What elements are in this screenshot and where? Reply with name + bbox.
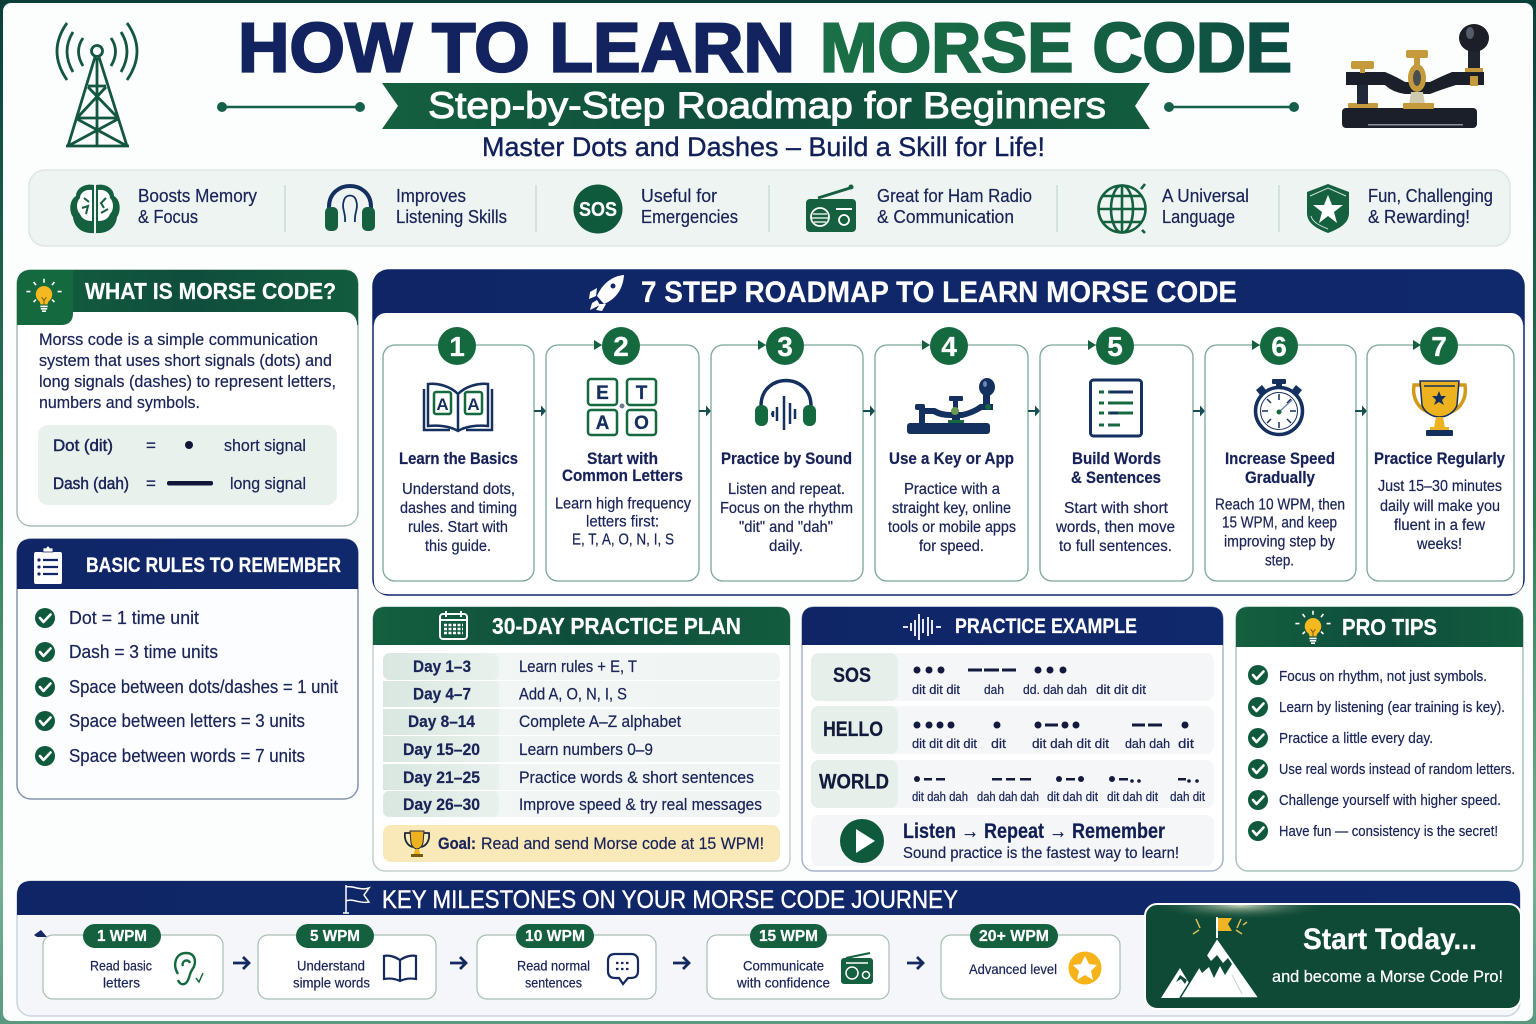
goal callout: Goal: [438, 834, 476, 853]
rule list: Space between words = 7 units [69, 746, 305, 766]
benefit: ham radio [806, 184, 1032, 232]
step 2 [546, 327, 699, 581]
example: SOS: dd. dah dah [1023, 683, 1087, 697]
row: day 8-14: Complete A–Z alphabet [519, 712, 681, 731]
step text: to full sentences. [1059, 538, 1172, 555]
benefit: rewarding [1307, 184, 1493, 233]
icon: ear [175, 953, 203, 984]
benefit: memory [70, 185, 257, 233]
title: MORSE CODE [820, 8, 1292, 86]
goal callout: Read and send Morse code at 15 WPM! [481, 834, 764, 853]
icon: morse key [907, 378, 995, 434]
number badge: 6 [1271, 331, 1287, 362]
number badge [438, 327, 476, 365]
description [39, 330, 336, 412]
icon: gold star [1068, 952, 1102, 984]
rule list: Space between letters = 3 units [69, 711, 305, 731]
step text: Understand dots, [402, 481, 515, 498]
step text: words, then move [1055, 519, 1175, 536]
row: day 15-20: Learn numbers 0–9 [519, 740, 653, 759]
step title [562, 450, 683, 485]
panel: start today call to action [1145, 904, 1521, 1009]
step text [1215, 496, 1345, 570]
icon: globe [1098, 184, 1146, 233]
benefit: memory: Boosts Memory [138, 186, 257, 206]
icon: play button [840, 819, 884, 863]
icon: radio tower [57, 23, 137, 146]
benefit: ham radio: & Communication [877, 207, 1014, 227]
heading: KEY MILESTONES ON YOUR MORSE CODE JOURNEY [382, 886, 958, 914]
dot and dash legend: = [146, 474, 156, 493]
row: day 1-3: Learn rules + E, T [519, 657, 637, 676]
example: HELLO: dah dah [1125, 737, 1170, 751]
step title: Increase Speed [1225, 450, 1335, 468]
heading: PRO TIPS [1342, 614, 1437, 640]
milestone: 1 WPM: Read basic [90, 958, 152, 974]
dot and dash legend [38, 425, 337, 505]
icon: stopwatch [1256, 379, 1302, 434]
arrow [907, 957, 923, 969]
header [57, 8, 1489, 162]
dot and dash legend: = [146, 436, 156, 455]
row: day 8-14: Day 8–14 [408, 712, 475, 731]
example: SOS: SOS [833, 664, 871, 687]
step text: daily. [769, 538, 803, 555]
schedule table [383, 653, 780, 817]
example: WORLD [811, 760, 1214, 808]
example: HELLO [811, 706, 1214, 754]
step 1 [383, 327, 534, 581]
step 3 [711, 327, 863, 581]
row: day 1-3 [383, 653, 780, 680]
number badge [602, 327, 640, 365]
heading: 30-DAY PRACTICE PLAN [492, 613, 741, 639]
icon: gold trophy [405, 831, 429, 857]
panel: key milestones [17, 881, 1520, 1016]
step text: Start with short [1064, 500, 1169, 517]
arrow [1028, 406, 1040, 416]
icon: light bulb [17, 270, 73, 325]
heading: PRACTICE EXAMPLE [955, 615, 1137, 638]
tip list: Challenge yourself with higher speed. [1279, 792, 1501, 809]
tagline: Master Dots and Dashes – Build a Skill for Life! [482, 132, 1045, 162]
icon: light bulb [1295, 611, 1331, 643]
number badge [1260, 327, 1298, 365]
number badge: 7 [1431, 331, 1447, 362]
icon: letter tiles: O [634, 413, 649, 434]
dot and dash legend: Dot (dit) [53, 436, 113, 455]
row: day 4-7: Day 4–7 [413, 684, 471, 704]
panel: practice example [802, 607, 1223, 871]
heading: BASIC RULES TO REMEMBER [86, 554, 341, 577]
icon: star shield [1307, 184, 1349, 233]
number badge: 2 [613, 331, 629, 362]
milestone: 5 WPM [258, 924, 436, 999]
example: WORLD: dah dah dah [977, 790, 1039, 804]
tip list [1248, 665, 1515, 841]
decorative connector right [1164, 102, 1299, 112]
benefit: universal language [1098, 184, 1249, 233]
benefit: universal language: A Universal [1162, 186, 1249, 206]
tip list: Practice a little every day. [1279, 730, 1433, 747]
description: long signals (dashes) to represent letters, [39, 372, 336, 391]
icon: headphones [325, 186, 375, 231]
step text: 15 WPM, and keep [1222, 514, 1337, 532]
subtitle banner: Step-by-Step Roadmap for Beginners [428, 85, 1106, 126]
step title: Build Words [1072, 450, 1161, 468]
milestone: 10 WPM [477, 924, 656, 999]
arrow [699, 406, 711, 416]
milestone: 5 WPM: Understand [297, 958, 365, 974]
benefit: universal language: Language [1162, 207, 1235, 227]
heading: 7 STEP ROADMAP TO LEARN MORSE CODE [641, 276, 1237, 309]
dot and dash legend: short signal [224, 436, 306, 455]
arrow [233, 957, 249, 969]
step text: weeks! [1416, 536, 1462, 553]
milestone: 5 WPM: simple words [293, 974, 370, 990]
step title: & Sentences [1071, 469, 1161, 487]
step title: Start with [587, 450, 658, 468]
milestone: 1 WPM: 1 WPM [97, 928, 147, 945]
step text [1055, 500, 1175, 555]
step title: Learn the Basics [399, 450, 518, 468]
icon: radio [841, 953, 873, 984]
number badge [1096, 327, 1134, 365]
panel: start today call to action: Start Today... [1303, 923, 1477, 956]
step text: Just 15–30 minutes [1378, 478, 1502, 495]
title: HOW TO LEARN [238, 8, 795, 86]
milestone: 20+ WPM [941, 924, 1120, 999]
arrow [450, 957, 466, 969]
icon: letter tiles: A [596, 413, 610, 434]
step title: Practice Regularly [1374, 450, 1506, 468]
number badge: 1 [449, 331, 465, 362]
step text: for speed. [919, 538, 984, 555]
milestone: 5 WPM: 5 WPM [310, 928, 360, 945]
example: WORLD: dit dah dah [912, 790, 968, 804]
milestone: 1 WPM [43, 924, 223, 999]
rule list [35, 608, 338, 766]
icon: clipboard [34, 546, 62, 584]
row: day 21-25 [383, 764, 780, 790]
milestone: 15 WPM: with confidence [736, 974, 830, 990]
step text: rules. Start with [408, 519, 508, 536]
milestone: 10 WPM: 10 WPM [525, 928, 585, 945]
arrow [1193, 406, 1205, 416]
icon: calendar [440, 611, 467, 639]
dot and dash legend: long signal [230, 474, 306, 493]
benefit: emergencies [574, 184, 738, 234]
panel: benefits bar [29, 170, 1510, 246]
step text: Practice with a [904, 481, 1000, 498]
milestone: 15 WPM: Communicate [743, 958, 824, 974]
benefit: emergencies: Emergencies [641, 207, 738, 227]
row: day 15-20: Day 15–20 [403, 740, 480, 759]
example: WORLD: dit dah dit [1107, 790, 1158, 804]
row: day 21-25: Day 21–25 [403, 768, 480, 787]
example: SOS: dit dit dit [912, 683, 961, 697]
icon: open book [424, 384, 492, 431]
step 5 [1040, 327, 1193, 581]
arrow [534, 406, 546, 416]
step 7 [1367, 327, 1514, 581]
milestone: 10 WPM: Read normal [517, 958, 590, 974]
step text: improving step by [1224, 534, 1335, 550]
rule list: Dash = 3 time units [69, 642, 218, 662]
step text [1378, 478, 1502, 553]
icon: open book: A [467, 395, 480, 414]
panel: pro tips [1236, 607, 1523, 871]
icon: trophy [1414, 381, 1465, 436]
step text: E, T, A, O, N, I, S [572, 532, 674, 548]
step text: Focus on the rhythm [720, 500, 853, 517]
row: day 26-30: Improve speed & try real messages [519, 795, 762, 814]
step title [1071, 450, 1161, 487]
icon: flag [343, 885, 369, 913]
row: day 21-25: Practice words & short sentences [519, 768, 754, 787]
benefit: listening: Improves [396, 186, 466, 206]
step title: Use a Key or App [889, 450, 1014, 468]
icon: telegraph key [1342, 24, 1489, 128]
example: WORLD: dah dit [1170, 790, 1205, 804]
number badge [930, 327, 968, 365]
step text [400, 481, 517, 555]
description: system that uses short signals (dots) and [39, 351, 332, 370]
decorative connector left [217, 102, 365, 112]
benefit: emergencies: Useful for [641, 186, 717, 206]
arrow [863, 406, 875, 416]
icon: radio [806, 184, 856, 232]
step text: Reach 10 WPM, then [1215, 496, 1345, 514]
benefit: rewarding: Fun, Challenging [1368, 186, 1493, 206]
listen repeat remember callout: Listen → Repeat → Remember [903, 820, 1165, 843]
tip list: Focus on rhythm, not just symbols. [1279, 668, 1487, 685]
panel: basic rules [17, 539, 358, 799]
row: day 8-14 [383, 709, 780, 735]
arrow [1355, 406, 1367, 416]
row: day 1-3: Day 1–3 [413, 657, 471, 676]
heading: WHAT IS MORSE CODE? [85, 278, 336, 304]
row: day 4-7: Add A, O, N, I, S [519, 684, 627, 704]
title [238, 8, 1292, 86]
icon: headphones with sound wave [755, 380, 816, 430]
panel: start today call to action: and become a Morse Code Pro! [1272, 967, 1503, 986]
description: Morss code is a simple communication [39, 330, 318, 349]
number badge: 4 [941, 331, 957, 362]
step text: "dit" and "dah" [739, 519, 833, 536]
row: day 26-30 [383, 791, 780, 817]
benefit: listening [325, 186, 507, 231]
milestone: 15 WPM [707, 924, 889, 999]
tip list: Have fun — consistency is the secret! [1279, 823, 1498, 840]
number badge [1420, 327, 1458, 365]
step text: tools or mobile apps [888, 519, 1016, 536]
icon: SOS badge: SOS [579, 199, 617, 221]
example: WORLD: WORLD [819, 770, 889, 794]
example: HELLO: dit dah dit dit [1032, 737, 1110, 751]
step 6 [1205, 327, 1356, 581]
listen repeat remember callout [811, 815, 1214, 866]
description: numbers and symbols. [39, 393, 200, 412]
panel: 7 step roadmap [373, 270, 1524, 595]
icon: sound wave [903, 614, 941, 640]
benefit: memory: & Focus [138, 207, 198, 227]
step text: daily will make you [1380, 498, 1500, 515]
step text: Listen and repeat. [728, 481, 845, 498]
number badge: 5 [1107, 331, 1123, 362]
benefit: ham radio: Great for Ham Radio [877, 186, 1032, 206]
tip list: Learn by listening (ear training is key). [1279, 699, 1505, 716]
step title [1225, 450, 1335, 487]
icon: book [384, 956, 416, 981]
step title: Practice by Sound [721, 450, 852, 468]
number badge [766, 327, 804, 365]
icon: SOS badge [574, 184, 622, 234]
icon: open book: A [436, 395, 449, 414]
example: WORLD: dit dah dit [1047, 790, 1098, 804]
step text: dashes and timing [400, 500, 517, 517]
example: HELLO: dit dit dit dit [912, 737, 978, 751]
example: SOS [811, 653, 1214, 701]
step title: Gradually [1245, 469, 1316, 487]
step 4 [875, 327, 1028, 581]
milestone: 1 WPM: letters [103, 974, 140, 990]
milestone: 20+ WPM: 20+ WPM [979, 928, 1049, 945]
benefit: listening: Listening Skills [396, 207, 507, 227]
example: SOS: dah [984, 683, 1004, 697]
step text [555, 496, 691, 548]
example: HELLO: dit [991, 737, 1007, 751]
icon: speech bubble [608, 954, 638, 984]
rule list: Dot = 1 time unit [69, 608, 199, 628]
step title: Common Letters [562, 467, 683, 485]
icon: brain [70, 185, 120, 233]
number badge: 3 [777, 331, 793, 362]
row: day 15-20 [383, 736, 780, 762]
example: HELLO: HELLO [823, 718, 883, 741]
milestone: 15 WPM: 15 WPM [759, 928, 818, 945]
icon: rocket [589, 275, 624, 311]
marker [34, 930, 47, 937]
goal callout [383, 825, 780, 862]
listen repeat remember callout: Sound practice is the fastest way to learn! [903, 845, 1179, 862]
rule list: Space between dots/dashes = 1 unit [69, 677, 338, 697]
panel: 30-day practice plan [373, 607, 790, 871]
row: day 26-30: Day 26–30 [403, 795, 480, 814]
dot and dash legend: Dash (dah) [53, 474, 129, 493]
icon: letter tiles: T [636, 383, 648, 404]
step text [720, 481, 853, 555]
step text: step. [1265, 552, 1294, 570]
step text: straight key, online [892, 500, 1011, 517]
milestone: 20+ WPM: Advanced level [969, 961, 1057, 977]
example: SOS: dit dit dit [1096, 683, 1147, 697]
step text: this guide. [425, 538, 491, 555]
milestone: 10 WPM: sentences [525, 974, 582, 990]
icon: letter tiles [588, 379, 656, 435]
icon: mountain with flag [1161, 917, 1259, 998]
icon: document list [1090, 380, 1142, 436]
step text: Learn high frequency [555, 496, 691, 512]
panel: what is morse code [17, 270, 358, 526]
step text [888, 481, 1016, 555]
step text: fluent in a few [1394, 517, 1486, 534]
icon: letter tiles: E [596, 383, 609, 404]
row: day 4-7 [383, 681, 780, 707]
step text: letters first: [586, 514, 659, 530]
example: HELLO: dit [1178, 737, 1195, 751]
benefit: rewarding: & Rewarding! [1368, 207, 1470, 227]
arrow [673, 957, 689, 969]
